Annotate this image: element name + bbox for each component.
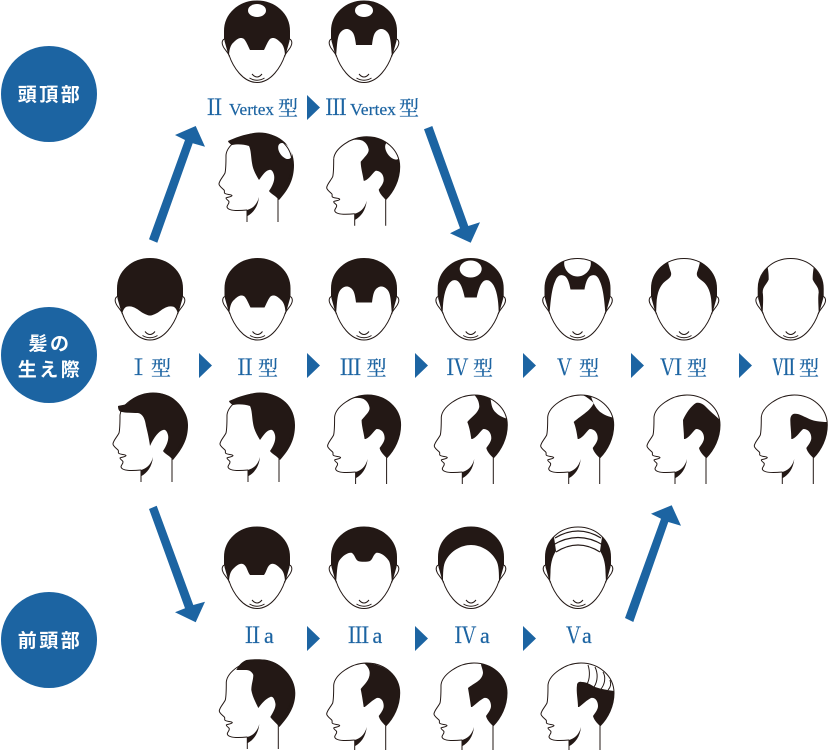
label: IIa	[241, 619, 274, 650]
category badge: hairline: 髪の	[28, 333, 72, 355]
head front: type III	[329, 258, 399, 340]
label: type III: 型	[366, 357, 386, 380]
label: type VI: Ⅵ	[660, 351, 682, 382]
label: IVa: a	[480, 623, 490, 648]
label: IVa: Ⅳ	[454, 619, 477, 650]
label: II Vertex: 型	[278, 97, 298, 120]
label: III Vertex: Ⅲ	[325, 91, 347, 122]
label: type IV	[446, 351, 493, 382]
head front: IIIa	[329, 527, 399, 608]
head profile: type VI	[647, 395, 720, 484]
head front: type IV	[436, 258, 505, 340]
head front: type VI	[649, 258, 719, 340]
label: IVa	[454, 619, 490, 650]
label: type IV: Ⅳ	[446, 351, 469, 382]
step arrow	[415, 626, 428, 651]
label: type VI: 型	[687, 357, 707, 380]
arrow: III Vertex down to type IV	[424, 126, 480, 243]
label: II Vertex: Vertex	[229, 100, 274, 119]
category badge: hairline	[1, 307, 97, 403]
label: IIIa	[347, 619, 382, 650]
arrow: type I up to II Vertex	[149, 126, 205, 243]
head profile: type I	[113, 393, 188, 482]
step arrow	[739, 353, 752, 378]
label: Va: Ⅴ	[562, 619, 585, 650]
step arrow	[307, 353, 320, 378]
label: IIIa: a	[372, 623, 382, 648]
head front: type VII	[756, 258, 825, 340]
step arrow	[415, 353, 428, 378]
label: type VI	[660, 351, 707, 382]
label: type IV: 型	[473, 357, 493, 380]
step arrow	[631, 353, 644, 378]
label: II Vertex	[203, 91, 298, 122]
arrow: Va up to type VI	[625, 505, 681, 622]
label: type II: Ⅱ	[234, 351, 256, 382]
arrow: type I down to IIa	[149, 506, 205, 622]
label: III Vertex: 型	[399, 97, 419, 120]
head front: type I	[115, 258, 185, 340]
label: type I	[127, 351, 171, 382]
head profile: Va	[541, 663, 614, 750]
label: type III: Ⅲ	[339, 351, 362, 382]
category badge: crown	[1, 46, 97, 142]
step arrow	[307, 95, 320, 120]
label: type V: 型	[579, 357, 599, 380]
category badge: front of head: 前頭部	[18, 630, 82, 652]
head front: II Vertex	[222, 1, 292, 82]
head profile: type III	[328, 395, 401, 484]
label: type I: Ⅰ	[127, 351, 150, 382]
head profile: type VII	[754, 395, 827, 484]
head front: type V	[543, 258, 612, 340]
category badge: front of head	[1, 592, 97, 688]
head front: IIa	[222, 527, 292, 608]
label: IIIa: Ⅲ	[347, 619, 370, 650]
head profile: III Vertex	[327, 137, 403, 226]
label: type I: 型	[151, 357, 171, 380]
head front: type II	[223, 258, 292, 340]
label: type II	[234, 351, 278, 382]
label: type III	[339, 351, 386, 382]
head front: III Vertex	[329, 1, 399, 82]
label: type VII: 型	[799, 357, 819, 380]
head profile: type IV	[434, 395, 508, 484]
head profile: IIIa	[327, 663, 400, 750]
label: II Vertex: Ⅱ	[203, 91, 226, 122]
label: III Vertex	[325, 91, 419, 122]
head profile: IIa	[219, 659, 295, 749]
label: IIa: a	[264, 623, 274, 648]
category badge: crown: 頭頂部	[18, 84, 82, 106]
step arrow	[199, 353, 212, 378]
label: IIa: Ⅱ	[241, 619, 264, 650]
step arrow	[307, 626, 320, 651]
label: type II: 型	[258, 357, 278, 380]
label: type V	[553, 351, 599, 382]
label: type V: Ⅴ	[553, 351, 576, 382]
label: III Vertex: Vertex	[350, 100, 397, 119]
label: Va: a	[582, 623, 592, 648]
head front: IVa	[436, 527, 506, 608]
head profile: II Vertex	[219, 133, 295, 222]
head front: Va	[543, 527, 613, 608]
head profile: IVa	[434, 663, 507, 750]
step arrow	[523, 353, 536, 378]
label: type VII	[772, 351, 819, 382]
step arrow	[523, 626, 536, 651]
head profile: type II	[220, 393, 295, 482]
head profile: type V	[541, 395, 615, 484]
category badge: hairline: 生え際	[18, 359, 82, 381]
label: type VII: Ⅶ	[772, 351, 795, 382]
